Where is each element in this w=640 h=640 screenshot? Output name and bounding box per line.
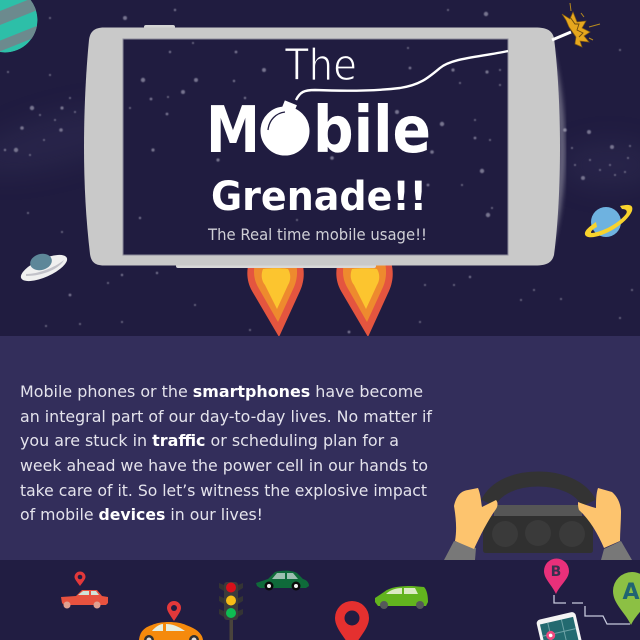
left sleeve <box>444 541 476 560</box>
icon: bomb <box>260 100 310 156</box>
icon: ringed planet <box>585 205 632 237</box>
icon: pink pin B <box>544 558 569 594</box>
icon: green pin A: A <box>622 580 640 605</box>
star field outside phone <box>4 9 633 333</box>
panel: space header background <box>0 0 640 336</box>
intro paragraph: you are stuck in traffic or scheduling plan for a <box>20 431 399 450</box>
icon: orange car pin <box>167 601 181 621</box>
icon: pink pin B: B <box>551 564 561 580</box>
steering wheel rim <box>488 479 589 503</box>
icon: orange car <box>139 622 203 640</box>
intro paragraph <box>20 382 432 524</box>
title: Mobile with bomb: bile <box>313 94 431 168</box>
title: Mobile with bomb: M <box>206 94 260 168</box>
phone screen <box>123 39 508 255</box>
route dashes <box>554 595 630 624</box>
right sleeve <box>601 541 632 560</box>
icon: traffic light <box>219 582 243 640</box>
fuse tip outside the phone <box>552 32 571 40</box>
icon: phone with map <box>536 611 586 640</box>
title: Mobile with bomb <box>206 94 431 168</box>
right hand <box>578 488 621 548</box>
panel: intro text band <box>0 336 640 560</box>
bomb fuse <box>296 51 508 100</box>
rocket flame right <box>336 262 393 337</box>
icon: large red pin <box>335 601 369 640</box>
icon: green pin A <box>613 572 640 625</box>
icon: lime car <box>375 586 428 609</box>
phone glow <box>548 45 562 250</box>
phone body <box>84 25 560 268</box>
rocket flame left <box>247 262 304 337</box>
left hand <box>454 488 498 549</box>
icon: fuse spark <box>562 3 600 47</box>
intro paragraph: take care of it. So let’s witness the explosive impact <box>20 481 427 500</box>
screen stars <box>129 42 501 221</box>
dashboard <box>483 505 593 553</box>
intro paragraph: of mobile devices in our lives! <box>20 505 263 524</box>
icon: green car <box>256 571 309 590</box>
intro paragraph: an integral part of our day-to-day lives. No matter if <box>20 407 432 426</box>
icon: small red pin <box>74 572 86 586</box>
icon: flying saucer <box>18 250 70 286</box>
icon: red car <box>61 590 108 608</box>
illustration: hands on steering wheel <box>444 479 632 560</box>
subtitle: Grenade: Grenade!! <box>211 174 427 220</box>
intro paragraph: Mobile phones or the smartphones have become <box>20 382 423 401</box>
title: The: The <box>284 40 357 91</box>
icon: striped planet <box>0 0 38 52</box>
milky way glow <box>0 51 640 187</box>
intro paragraph: week ahead we have the power cell in our hands to <box>20 456 428 475</box>
panel: traffic band <box>0 560 640 640</box>
subtitle: real time usage: The Real time mobile usage!! <box>207 225 427 244</box>
